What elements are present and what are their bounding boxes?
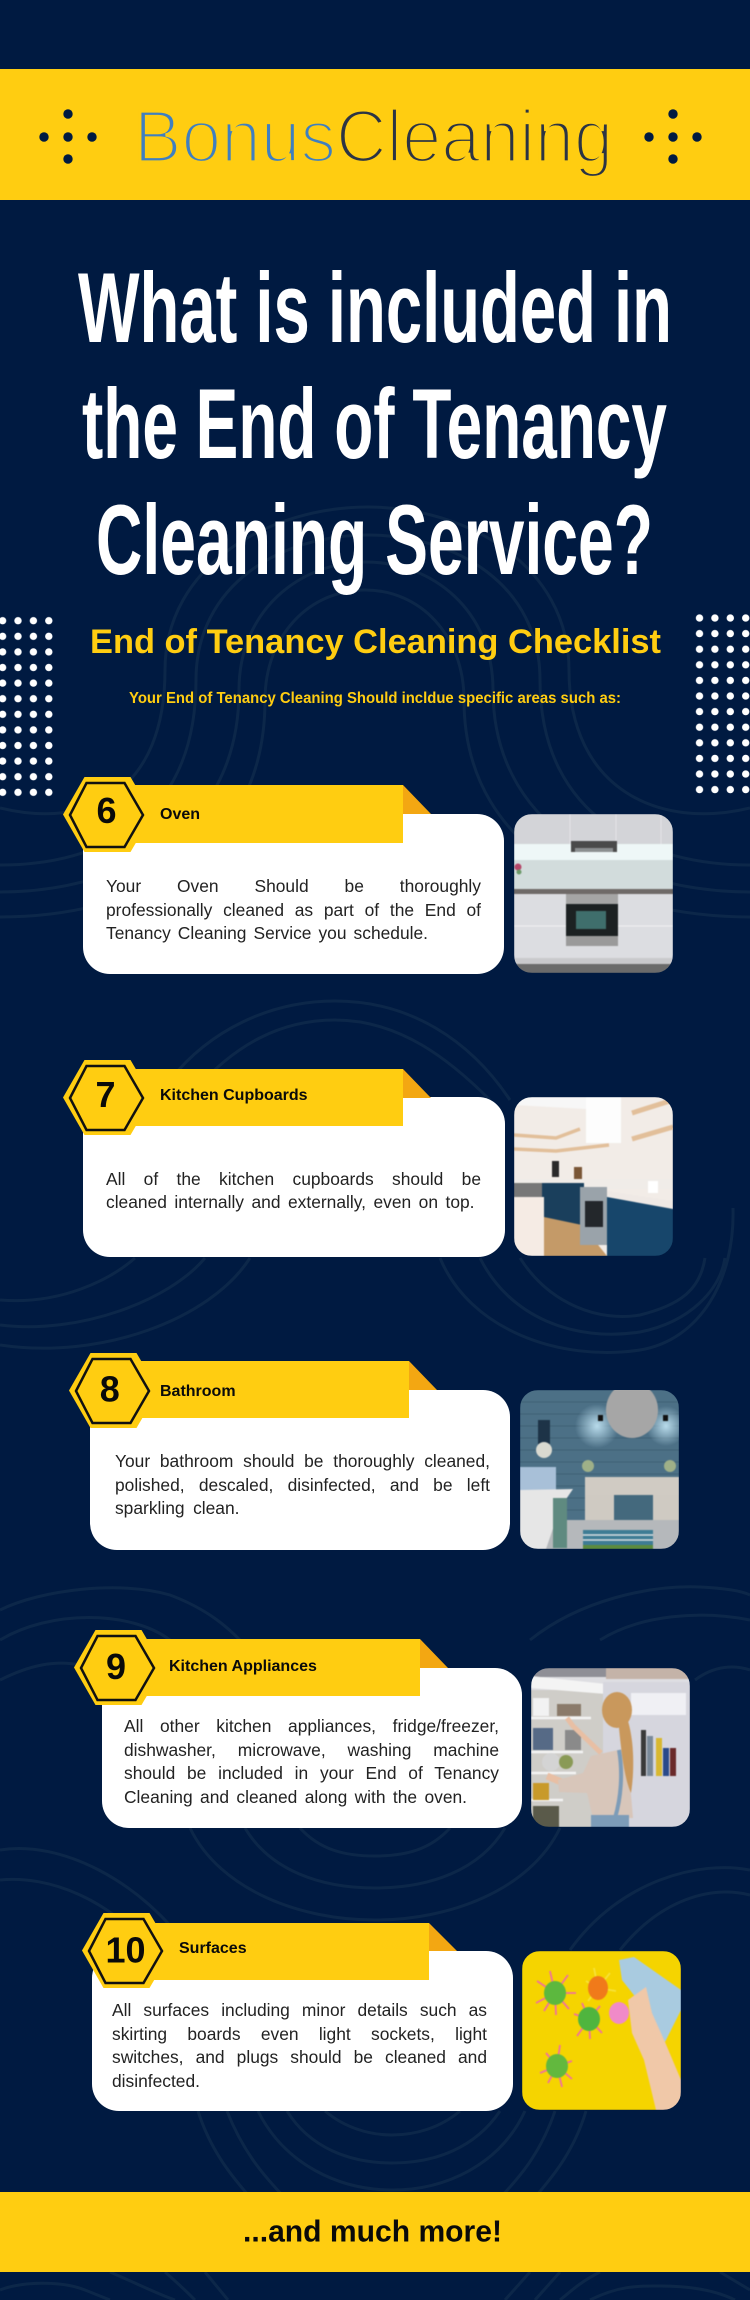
text block	[106, 876, 481, 943]
card	[102, 1668, 522, 1828]
number badge 6: 6	[96, 790, 116, 831]
text block	[106, 1169, 481, 1212]
panel: kitchen appliances	[74, 1630, 690, 1828]
main title	[78, 260, 672, 595]
card	[90, 1390, 510, 1550]
logo wordmark: Bonus	[134, 95, 336, 178]
text block: polished, descaled, disinfected, and be left	[115, 1475, 490, 1495]
text block: Your bathroom should be thoroughly cleaned,	[115, 1451, 490, 1471]
ribbon	[119, 1361, 409, 1418]
ribbon fold	[420, 1639, 448, 1668]
text block	[115, 1451, 490, 1518]
number badge 7: 7	[95, 1074, 115, 1115]
text block: sparkling clean.	[115, 1498, 239, 1518]
panel: kitchen cupboards	[63, 1060, 673, 1257]
logo banner	[0, 69, 750, 200]
number badge 7	[63, 1060, 144, 1135]
decorative dot grids	[0, 614, 750, 796]
checklist heading: Your End of Tenancy Cleaning Should incldue specific areas such as:	[129, 690, 621, 707]
heading: Kitchen Appliances	[169, 1658, 317, 1675]
photo: surfaces	[522, 1951, 681, 2110]
logo wordmark	[134, 95, 613, 178]
footer banner	[0, 2192, 750, 2272]
number badge 6	[63, 777, 144, 852]
ribbon	[112, 785, 402, 843]
number badge 8	[69, 1353, 150, 1428]
photo: bathroom	[520, 1390, 679, 1549]
heading: Bathroom	[160, 1382, 236, 1400]
number badge 10	[82, 1913, 164, 1988]
footer text: ...and much more!	[243, 2214, 502, 2249]
heading: Surfaces	[179, 1940, 247, 1956]
icon: left dot cluster	[39, 109, 97, 164]
text block: skirting boards even light sockets, light	[112, 2024, 487, 2044]
card	[83, 1097, 505, 1257]
text block: Cleaning and cleaned along with the oven.	[124, 1787, 467, 1807]
text block: cleaned internally and externally, even on top.	[106, 1192, 474, 1212]
text block: Tenancy Cleaning Service you schedule.	[106, 923, 428, 943]
photo: fridge	[531, 1668, 690, 1827]
text block: disinfected.	[112, 2071, 200, 2091]
text block: dishwasher, microwave, washing machine	[124, 1740, 499, 1760]
ribbon	[112, 1069, 403, 1126]
number badge 8: 8	[99, 1369, 119, 1410]
photo: oven	[514, 814, 673, 973]
ribbon fold	[429, 1923, 457, 1951]
number badge 9	[74, 1630, 156, 1705]
text block: All other kitchen appliances, fridge/freezer,	[124, 1716, 499, 1736]
text block	[112, 2000, 487, 2091]
ribbon fold	[403, 785, 431, 814]
ribbon	[124, 1639, 420, 1696]
ribbon	[132, 1923, 429, 1980]
checklist heading: End of Tenancy Cleaning Checklist	[90, 623, 661, 661]
card	[83, 814, 504, 974]
heading: Kitchen Cupboards	[160, 1087, 308, 1104]
number badge 10: 10	[105, 1930, 146, 1971]
photo: kitchen	[514, 1097, 673, 1256]
text block: All of the kitchen cupboards should be	[106, 1169, 481, 1189]
text block	[124, 1716, 499, 1807]
text block: switches, and plugs should be cleaned and	[112, 2047, 487, 2067]
logo wordmark: Cleaning	[336, 95, 613, 178]
icon: right dot cluster	[644, 109, 702, 164]
panel: bathroom	[69, 1353, 679, 1550]
checklist heading	[90, 623, 661, 707]
text block: should be included in your End of Tenancy	[124, 1763, 499, 1783]
card	[92, 1951, 513, 2111]
panel: surfaces	[82, 1913, 681, 2111]
text block: All surfaces including minor details such as	[112, 2000, 487, 2020]
number badge 9: 9	[106, 1646, 126, 1687]
text block: Your Oven Should be thoroughly	[106, 876, 481, 896]
panel: oven	[63, 777, 673, 974]
ribbon fold	[403, 1069, 431, 1098]
ribbon fold	[409, 1361, 437, 1390]
text block: professionally cleaned as part of the End of	[106, 900, 481, 920]
heading: Oven	[160, 806, 200, 822]
